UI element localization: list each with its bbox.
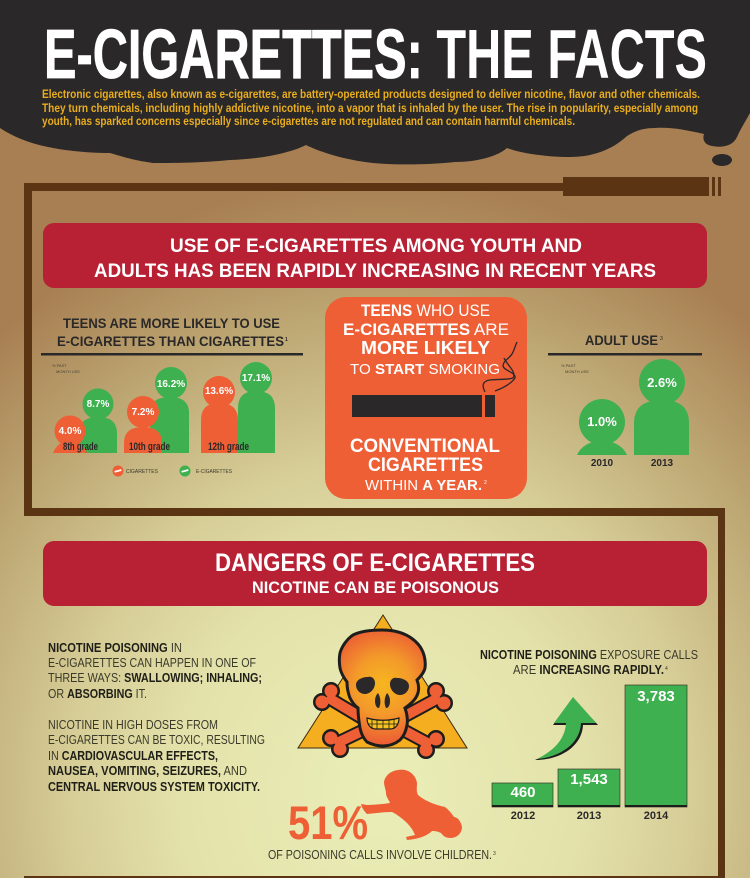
legend: CIGARETTES [126, 469, 159, 475]
smoke cloud header [0, 0, 750, 166]
person 2010: 1.0% [587, 414, 617, 429]
icon: rising arrow [535, 697, 598, 760]
callout upper text: E-CIGARETTES ARE [343, 320, 509, 339]
people chart 12th grade [201, 362, 275, 453]
bar 2012 [492, 783, 553, 822]
teens heading: TEENS ARE MORE LIKELY TO USE [63, 315, 280, 331]
person 2013 [634, 359, 689, 469]
axis note [52, 363, 80, 374]
text block: poisoning ways [48, 641, 262, 701]
person 2010: 2010 [591, 458, 614, 469]
people chart 12th grade: 17.1% [242, 373, 270, 384]
person 2013: 2.6% [647, 375, 677, 390]
teens heading: E-CIGARETTES THAN CIGARETTES [57, 333, 284, 349]
text block: toxic effects: IN CARDIOVASCULAR EFFECTS, [48, 749, 218, 763]
axis note: % PAST [52, 363, 67, 368]
people chart 8th grade: 4.0% [59, 426, 82, 437]
text block: poisoning ways: NICOTINE POISONING IN [48, 641, 182, 655]
banner: dangers [43, 541, 707, 606]
axis note [561, 363, 589, 374]
people chart 12th grade: 12th grade [208, 441, 249, 453]
callout lower text: WITHIN A YEAR. [365, 477, 482, 494]
callout lower text [350, 435, 500, 494]
heading: exposure calls: ARE INCREASING RAPIDLY. [513, 663, 664, 677]
bar 2013 [558, 769, 620, 822]
people chart 12th grade: 13.6% [205, 386, 233, 397]
person 2010 [577, 399, 627, 469]
callout upper text: TO START SMOKING [350, 361, 500, 378]
intro paragraph: youth, has sparked concerns especially since e-cigarettes are not regulated and can contain harmful chemicals. [42, 116, 575, 128]
people chart 8th grade [53, 388, 117, 453]
person 2013: 2013 [651, 458, 674, 469]
bar 2012: 460 [510, 784, 536, 801]
adult heading [548, 332, 702, 356]
callout lower text: CONVENTIONAL [350, 435, 500, 457]
banner: youth and adult use [43, 223, 707, 288]
callout lower text: CIGARETTES [368, 454, 483, 476]
text block: toxic effects: NAUSEA, VOMITING, SEIZURES, AND [48, 764, 247, 778]
people chart 8th grade: 8.7% [87, 399, 110, 410]
banner: dangers: NICOTINE CAN BE POISONOUS [252, 578, 499, 597]
people chart 10th grade: 10th grade [129, 441, 170, 453]
cigarette frame line [24, 177, 725, 878]
callout lower text: 2 [484, 480, 487, 486]
bar 2013: 2013 [577, 810, 601, 822]
heading: exposure calls [480, 648, 698, 677]
bar chart: exposure calls [492, 685, 687, 822]
icon: skull and crossbones on warning triangle [298, 615, 467, 758]
callout upper text [343, 301, 509, 378]
text block: toxic effects: E-CIGARETTES CAN BE TOXIC, RESULTING [48, 733, 265, 747]
text block: toxic effects: CENTRAL NERVOUS SYSTEM TOXICITY. [48, 780, 260, 794]
callout upper text: TEENS WHO USE [361, 301, 490, 320]
banner: dangers: DANGERS OF E-CIGARETTES [215, 549, 535, 577]
people chart 8th grade: 8th grade [63, 441, 98, 453]
text block: poisoning ways: OR ABSORBING IT. [48, 687, 147, 701]
text block: toxic effects [48, 718, 265, 794]
legend [112, 466, 232, 476]
banner: youth and adult use: USE OF E-CIGARETTES AMONG YOUTH AND [170, 236, 582, 257]
adult heading: ADULT USE [585, 332, 658, 348]
icon: crawling baby [361, 770, 462, 840]
statistic: 51%: 51% [288, 796, 368, 849]
intro paragraph [42, 89, 700, 128]
text block: poisoning ways: THREE WAYS: SWALLOWING; INHALING; [48, 671, 262, 685]
axis note: MONTH USE [565, 369, 589, 374]
bar 2013: 1,543 [570, 771, 608, 788]
heading: exposure calls: NICOTINE POISONING EXPOSURE CALLS [480, 648, 698, 662]
caption: poisoning calls: OF POISONING CALLS INVOLVE CHILDREN. [268, 848, 492, 862]
heading: exposure calls: 4 [665, 666, 668, 672]
text block: toxic effects: NICOTINE IN HIGH DOSES FROM [48, 718, 218, 732]
axis note: % PAST [561, 363, 576, 368]
people chart 10th grade: 7.2% [132, 407, 155, 418]
bar 2014 [625, 685, 687, 822]
bar 2012: 2012 [511, 810, 535, 822]
adult heading: 3 [660, 336, 663, 342]
legend: E-CIGARETTES [196, 469, 232, 475]
panel: teens chart [41, 315, 303, 476]
teens heading [41, 315, 303, 356]
people chart 10th grade: 16.2% [157, 379, 185, 390]
people chart 10th grade [124, 367, 189, 453]
callout upper text: MORE LIKELY [361, 337, 491, 358]
bar 2014: 2014 [644, 810, 669, 822]
axis note: MONTH USE [56, 369, 80, 374]
bar 2014: 3,783 [637, 688, 675, 705]
icon: cigarette with smoke [352, 342, 517, 417]
caption: poisoning calls: 3 [493, 851, 496, 857]
panel: teens more likely callout [325, 297, 527, 499]
banner: youth and adult use: ADULTS HAS BEEN RAPIDLY INCREASING IN RECENT YEARS [94, 261, 656, 282]
teens heading: 1 [285, 337, 288, 343]
text block: poisoning ways: E-CIGARETTES CAN HAPPEN IN ONE OF [48, 656, 256, 670]
panel: adult use chart [548, 332, 702, 469]
